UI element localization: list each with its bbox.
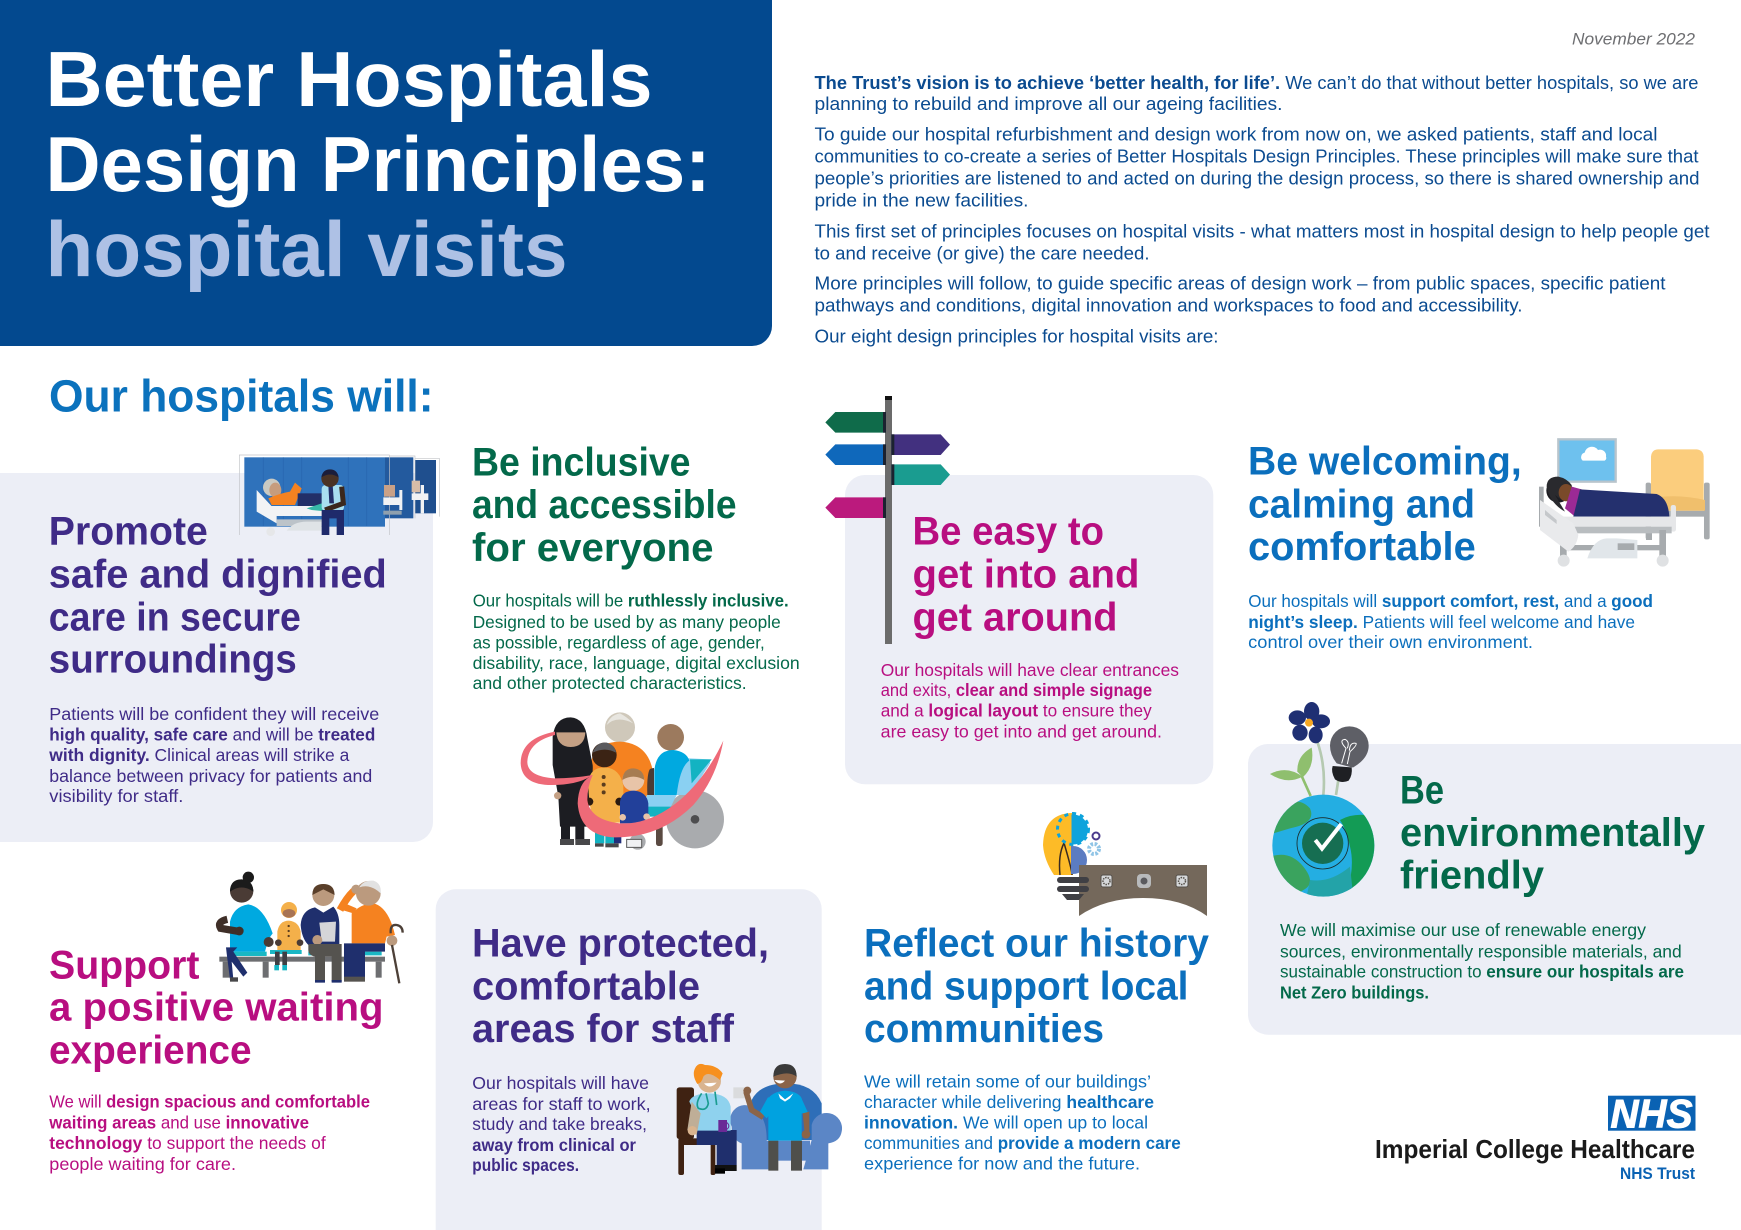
icon: globe with flower, leaves and light bulb	[1270, 702, 1377, 897]
body text: environment	[1280, 920, 1684, 1002]
heading: be inclusive: Be inclusive	[472, 440, 690, 484]
heading: be environmentally friendly: environmentally	[1400, 811, 1706, 855]
heading: be inclusive	[472, 440, 736, 570]
heading: be easy to get into: get around	[912, 595, 1118, 639]
panel: safe and dignified care	[0, 455, 439, 842]
body text: environment: We will maximise our use of renewable energy	[1280, 920, 1646, 940]
body text: history	[864, 1071, 1181, 1173]
panel: inclusive and accessible	[472, 440, 800, 850]
body text: waiting: waiting areas and use innovative	[48, 1113, 309, 1133]
body text: safe care: visibility for staff.	[49, 786, 183, 806]
heading: support a positive waiting experience	[49, 943, 384, 1072]
icon: patient in bed with window and chair	[1539, 439, 1710, 567]
date: November 2022	[1572, 30, 1696, 48]
body text: environment: sustainable construction to ensure our hospitals are	[1280, 961, 1684, 981]
intro text block: to and receive (or give) the care needed.	[814, 242, 1150, 263]
icon: hospital curtain ward with patient and nurse	[239, 455, 439, 536]
title panel	[0, 0, 772, 346]
panel: positive waiting experience	[48, 872, 403, 1174]
heading: reflect our history: communities	[864, 1007, 1104, 1051]
intro text block: The Trust’s vision is to achieve ‘better health, for life’. We can’t do that without better hospitals, so we are	[814, 72, 1698, 93]
body text: inclusive: Designed to be used by as many people	[473, 612, 781, 632]
icon: signpost	[825, 396, 950, 644]
body text: waiting	[48, 1092, 370, 1174]
panel: environmentally friendly	[1248, 702, 1741, 1035]
heading: be welcoming: comfortable	[1248, 525, 1476, 569]
body text: staff: away from clinical or	[472, 1135, 636, 1155]
intro text block: pride in the new facilities.	[814, 190, 1028, 211]
heading: support a positive waiting experience: a positive waiting	[49, 986, 384, 1030]
body text: easy: Our hospitals will have clear entrances	[881, 660, 1179, 680]
body text: easy: are easy to get into and get around.	[881, 721, 1162, 741]
logo: Imperial College Healthcare NHS Trust: NHS Trust	[1620, 1165, 1695, 1183]
body text: easy	[881, 660, 1179, 741]
panel: easy to get into and around	[825, 396, 1213, 784]
heading: be welcoming: Be welcoming,	[1248, 440, 1522, 484]
body text: history: character while delivering healthcare	[864, 1092, 1154, 1112]
body text: history: experience for now and the future.	[864, 1153, 1140, 1173]
heading: have protected areas: Have protected,	[472, 922, 769, 966]
body text: history: innovation. We will open up to local	[864, 1112, 1148, 1132]
body text: history: We will retain some of our buildings’	[864, 1071, 1151, 1091]
panel: welcoming, calming and comfortable	[1248, 439, 1710, 652]
heading: promote safe and dignified care: Promote	[49, 509, 208, 553]
body text: history: communities and provide a modern care	[864, 1133, 1181, 1153]
section heading: Our hospitals will:	[49, 371, 434, 422]
heading: reflect our history: and support local	[864, 964, 1188, 1008]
icon: light bulb, gears and historic wall	[1043, 813, 1207, 916]
intro text block: More principles will follow, to guide specific areas of design work – from public spaces, specific patient	[814, 272, 1666, 293]
heading: be easy to get into: get into and	[912, 553, 1140, 597]
body text: staff: areas for staff to work,	[472, 1094, 651, 1114]
body text: welcoming	[1248, 591, 1653, 652]
body text: safe care: high quality, safe care and will be treated	[49, 725, 375, 745]
heading: have protected areas	[472, 922, 769, 1051]
heading: be environmentally friendly	[1400, 768, 1706, 897]
body text: easy: and exits, clear and simple signage	[881, 680, 1152, 700]
heading: promote safe and dignified care: care in secure	[49, 595, 301, 639]
body text: staff	[472, 1073, 651, 1175]
intro text block: This first set of principles focuses on hospital visits - what matters most in hospital design to help people get	[814, 220, 1710, 241]
heading: have protected areas: areas for staff	[472, 1007, 735, 1051]
body text: staff: study and take breaks,	[472, 1114, 647, 1134]
heading: be welcoming: calming and	[1248, 482, 1475, 526]
icon: two staff members on a break	[677, 1064, 842, 1175]
icon: diverse group of people with wheelchair	[521, 712, 724, 850]
heading: be easy to get into: Be easy to	[912, 509, 1104, 553]
intro text block: To guide our hospital refurbishment and design work from now on, we asked patients, staff and local	[814, 124, 1658, 145]
intro text block: people’s priorities are listened to and acted on during the design process, so there is shared ownership and	[814, 168, 1700, 189]
panel: protected areas for staff	[436, 889, 842, 1230]
heading: promote safe and dignified care: safe and dignified	[49, 552, 387, 596]
body text: welcoming: Our hospitals will support comfort, rest, and a good	[1248, 591, 1653, 611]
body text: welcoming: night’s sleep. Patients will feel welcome and have	[1248, 612, 1635, 632]
body text: inclusive: and other protected characteristics.	[473, 673, 747, 693]
heading: have protected areas: comfortable	[472, 964, 700, 1008]
body text: inclusive	[473, 591, 800, 693]
body text: waiting: We will design spacious and comfortable	[49, 1092, 370, 1112]
body text: environment: Net Zero buildings.	[1280, 982, 1429, 1002]
intro text block: pathways and conditions, digital innovation and workspaces to food and accessibility.	[814, 294, 1522, 315]
panel: history and local communities	[864, 813, 1210, 1173]
body text: staff: public spaces.	[472, 1155, 579, 1175]
icon: people waiting on a bench	[219, 872, 403, 983]
intro text block: Our eight design principles for hospital visits are:	[814, 326, 1218, 347]
heading: reflect our history: Reflect our history	[864, 921, 1210, 965]
body text: safe care: balance between privacy for patients and	[49, 766, 372, 786]
logo: Imperial College Healthcare NHS Trust	[1375, 1092, 1696, 1183]
body text: environment: sources, environmentally responsible materials, and	[1280, 941, 1682, 961]
intro text block: planning to rebuild and improve all our ageing facilities.	[814, 93, 1282, 114]
heading: promote safe and dignified care: surroundings	[49, 637, 297, 681]
body text: inclusive: as possible, regardless of age, gender,	[473, 632, 765, 652]
heading: support a positive waiting experience: Support	[49, 943, 200, 987]
body text: welcoming: control over their own environment.	[1248, 632, 1533, 652]
body text: safe care	[48, 704, 379, 806]
heading: promote safe and dignified care	[49, 509, 387, 681]
logo: Imperial College Healthcare NHS Trust: Imperial College Healthcare	[1375, 1134, 1695, 1164]
title: Better Hospitals	[46, 35, 652, 123]
heading: be environmentally friendly: Be	[1400, 768, 1444, 812]
title: hospital visits	[46, 205, 568, 293]
intro text block: communities to co-create a series of Better Hospitals Design Principles. These principles will make sure that	[814, 146, 1698, 167]
logo: Imperial College Healthcare NHS Trust: NHS	[1610, 1092, 1693, 1136]
body text: waiting: technology to support the needs of	[49, 1133, 326, 1153]
body text: inclusive: Our hospitals will be ruthlessly inclusive.	[473, 591, 789, 611]
heading: be welcoming	[1248, 440, 1522, 569]
heading: be inclusive: for everyone	[472, 526, 714, 570]
heading: be inclusive: and accessible	[472, 483, 736, 527]
body text: inclusive: disability, race, language, digital exclusion	[473, 653, 800, 673]
body text: safe care: with dignity. Clinical areas will strike a	[48, 745, 350, 765]
body text: waiting: people waiting for care.	[49, 1154, 236, 1174]
heading: be easy to get into	[912, 509, 1140, 639]
heading: be environmentally friendly: friendly	[1400, 853, 1545, 897]
title: Design Principles:	[46, 120, 710, 208]
heading: reflect our history	[864, 921, 1210, 1051]
heading: support a positive waiting experience: experience	[49, 1028, 252, 1072]
body text: easy: and a logical layout to ensure they	[881, 701, 1152, 721]
body text: staff: Our hospitals will have	[472, 1073, 649, 1093]
intro text block	[814, 72, 1710, 347]
body text: safe care: Patients will be confident they will receive	[49, 704, 379, 724]
title	[46, 35, 710, 293]
